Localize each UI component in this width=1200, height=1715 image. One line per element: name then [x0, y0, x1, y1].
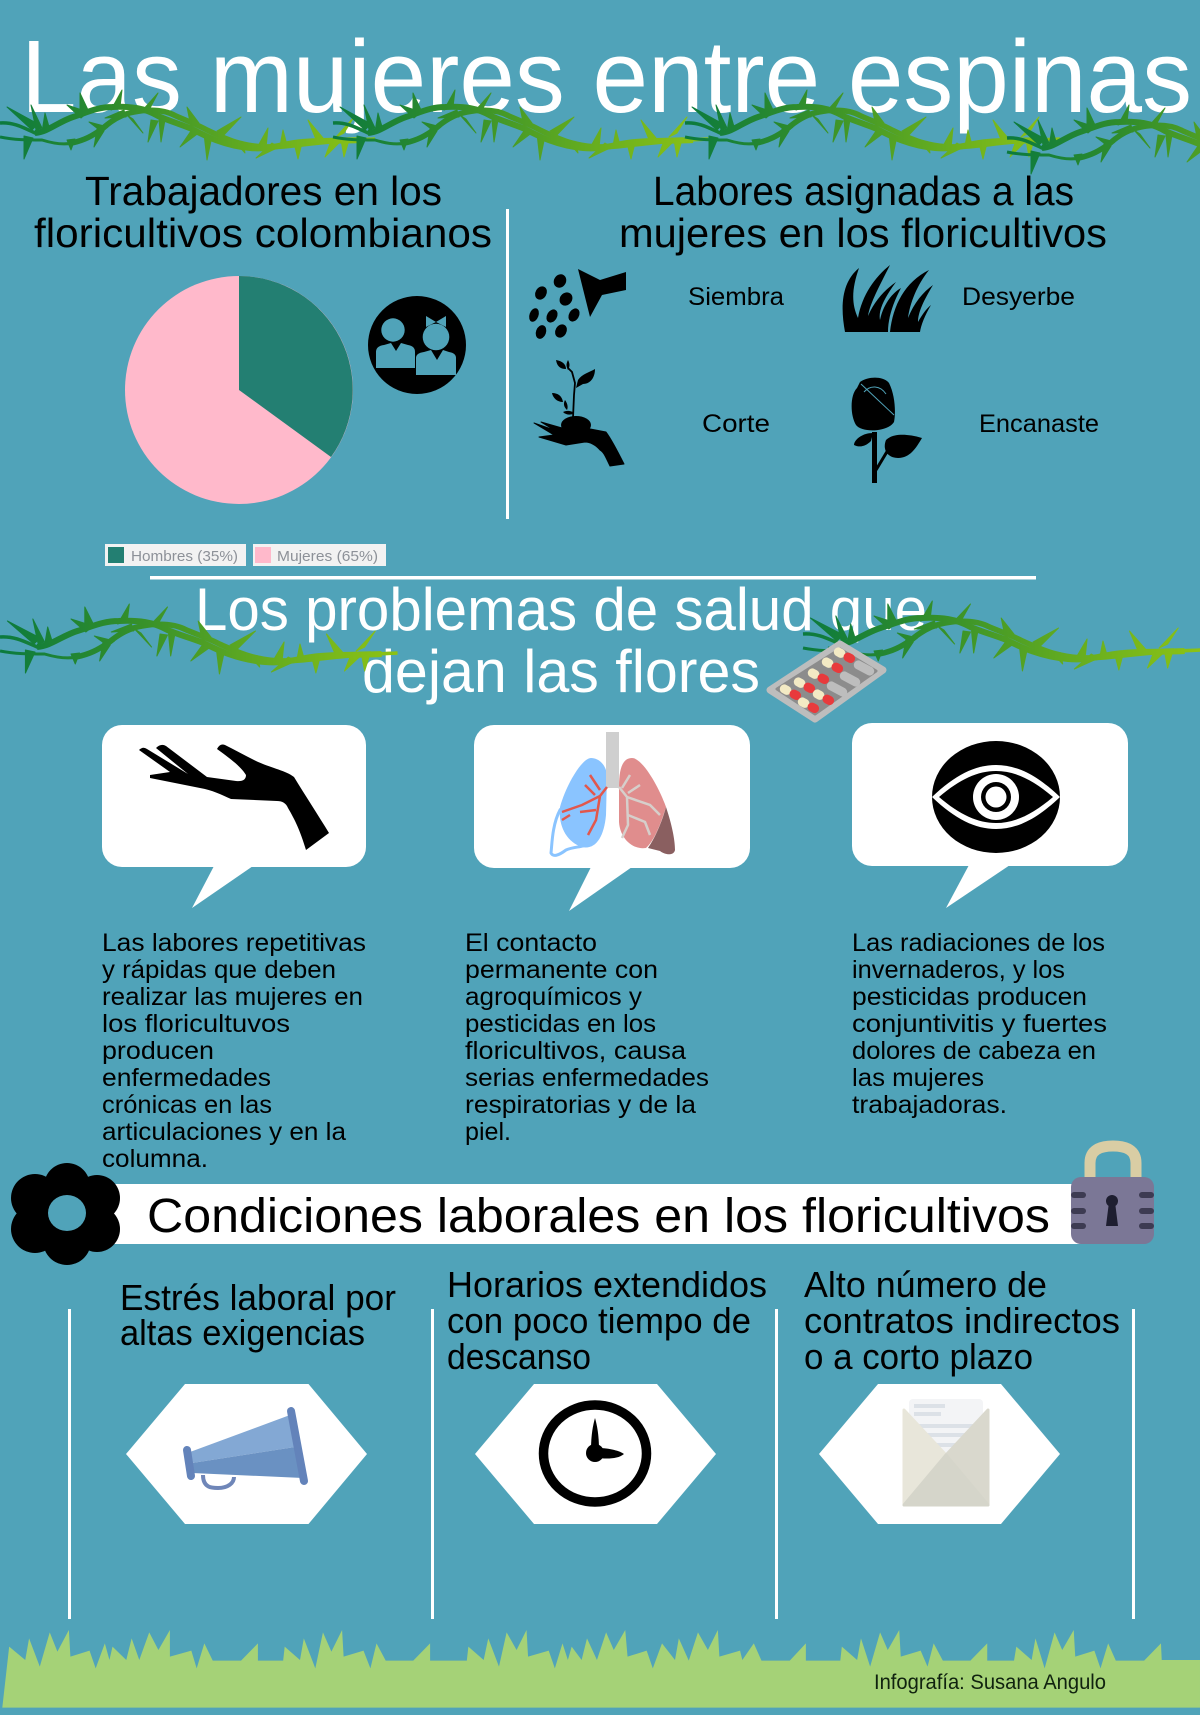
heading: horarios [447, 1264, 767, 1377]
heading: trabajadores: Trabajadores en los [85, 168, 442, 214]
text: joints: Las labores repetitivas [102, 929, 366, 957]
text: lungs: pesticidas en los [465, 1010, 656, 1038]
thorn vine: top [0, 90, 1200, 175]
legend [105, 544, 386, 566]
title: Las mujeres entre espinas [21, 19, 1192, 134]
heading: labores: mujeres en los floricultivos [619, 210, 1107, 256]
pie chart [125, 276, 353, 504]
heading: labores: Labores asignadas a las [653, 168, 1074, 214]
heading: contratos: contratos indirectos [804, 1300, 1120, 1341]
thorn vine: left [0, 604, 397, 674]
text: eyes: conjuntivitis y fuertes [852, 1010, 1107, 1038]
vertical divider [506, 209, 509, 519]
heading: labores [619, 168, 1107, 256]
text: eyes: dolores de cabeza en [852, 1037, 1096, 1065]
text: joints: y rápidas que deben [102, 956, 336, 984]
text: joints: los floricultuvos [102, 1010, 290, 1038]
text: eyes [852, 929, 1107, 1119]
heading: problemas de salud: Los problemas de salud que [195, 576, 927, 643]
icon: padlock [1071, 1146, 1154, 1244]
heading: estres [120, 1277, 396, 1353]
text: lungs: permanente con [465, 956, 658, 984]
heading: trabajadores [34, 168, 492, 256]
hexagon: clock [475, 1384, 716, 1524]
heading: problemas de salud [195, 576, 927, 705]
text: joints [102, 929, 366, 1173]
text: lungs: El contacto [465, 929, 597, 957]
divider [150, 576, 1036, 580]
text: joints: enfermedades [102, 1064, 271, 1092]
text: lungs: floricultivos, causa [465, 1037, 686, 1065]
icon: pill pack [770, 644, 883, 719]
icon: eye [932, 741, 1060, 853]
column dividers [68, 1309, 1135, 1619]
heading: trabajadores: floricultivos colombianos [34, 210, 492, 256]
panel: joints bubble [102, 725, 366, 908]
heading: estres: altas exigencias [120, 1312, 365, 1353]
text: joints: columna. [102, 1145, 208, 1173]
text: joints: realizar las mujeres en [102, 983, 363, 1011]
text: eyes: las mujeres [852, 1064, 984, 1092]
text: joints: producen [102, 1037, 214, 1065]
text: lungs [465, 929, 709, 1146]
hexagon: contract envelope [819, 1384, 1060, 1524]
heading: problemas de salud: dejan las flores [362, 638, 760, 705]
grass [2, 1630, 1200, 1708]
legend: Hombres (35%) [131, 548, 238, 565]
icon: flower [11, 1163, 120, 1265]
heading: contratos: Alto número de [804, 1264, 1047, 1305]
icon: envelope with document [904, 1399, 988, 1505]
icon: grass [843, 265, 933, 332]
text: joints: crónicas en las [102, 1091, 272, 1119]
heading: horarios: descanso [447, 1336, 591, 1377]
text: joints: articulaciones y en la [102, 1118, 346, 1146]
heading: estres: Estrés laboral por [120, 1277, 396, 1318]
legend: Mujeres (65%) [277, 548, 378, 565]
icon: men and women [368, 296, 466, 394]
panel: eye bubble [852, 723, 1128, 908]
text: eyes: invernaderos, y los [852, 956, 1065, 984]
heading: contratos: o a corto plazo [804, 1336, 1033, 1377]
heading: horarios: Horarios extendidos [447, 1264, 767, 1305]
icon: seeding [527, 269, 626, 340]
text: eyes: Las radiaciones de los [852, 929, 1105, 957]
label: corte: Corte [702, 410, 770, 438]
icon: clock [544, 1405, 646, 1502]
text: lungs: piel. [465, 1118, 511, 1146]
icon: hand holding plant [534, 360, 624, 466]
icon: rose [852, 378, 922, 483]
banner: condiciones: Condiciones laborales en los floricultivos [147, 1190, 1050, 1243]
icon: megaphone [187, 1411, 304, 1488]
heading: horarios: con poco tiempo de [447, 1300, 751, 1341]
label: encanaste: Encanaste [979, 410, 1099, 438]
panel: lungs bubble [474, 725, 750, 911]
text: eyes: trabajadoras. [852, 1091, 1007, 1119]
text: lungs: agroquímicos y [465, 983, 643, 1011]
hexagon: megaphone [126, 1384, 367, 1524]
text: lungs: serias enfermedades [465, 1064, 709, 1092]
icon: lungs [551, 732, 675, 855]
label: siembra: Siembra [688, 283, 784, 311]
label: desyerbe: Desyerbe [962, 283, 1075, 311]
thorn vine: right [803, 601, 1200, 671]
credit: Infografía: Susana Angulo [874, 1671, 1106, 1694]
icon: hand [139, 744, 329, 850]
text: lungs: respiratorias y de la [465, 1091, 696, 1119]
heading: contratos [804, 1264, 1120, 1377]
text: eyes: pesticidas producen [852, 983, 1087, 1011]
